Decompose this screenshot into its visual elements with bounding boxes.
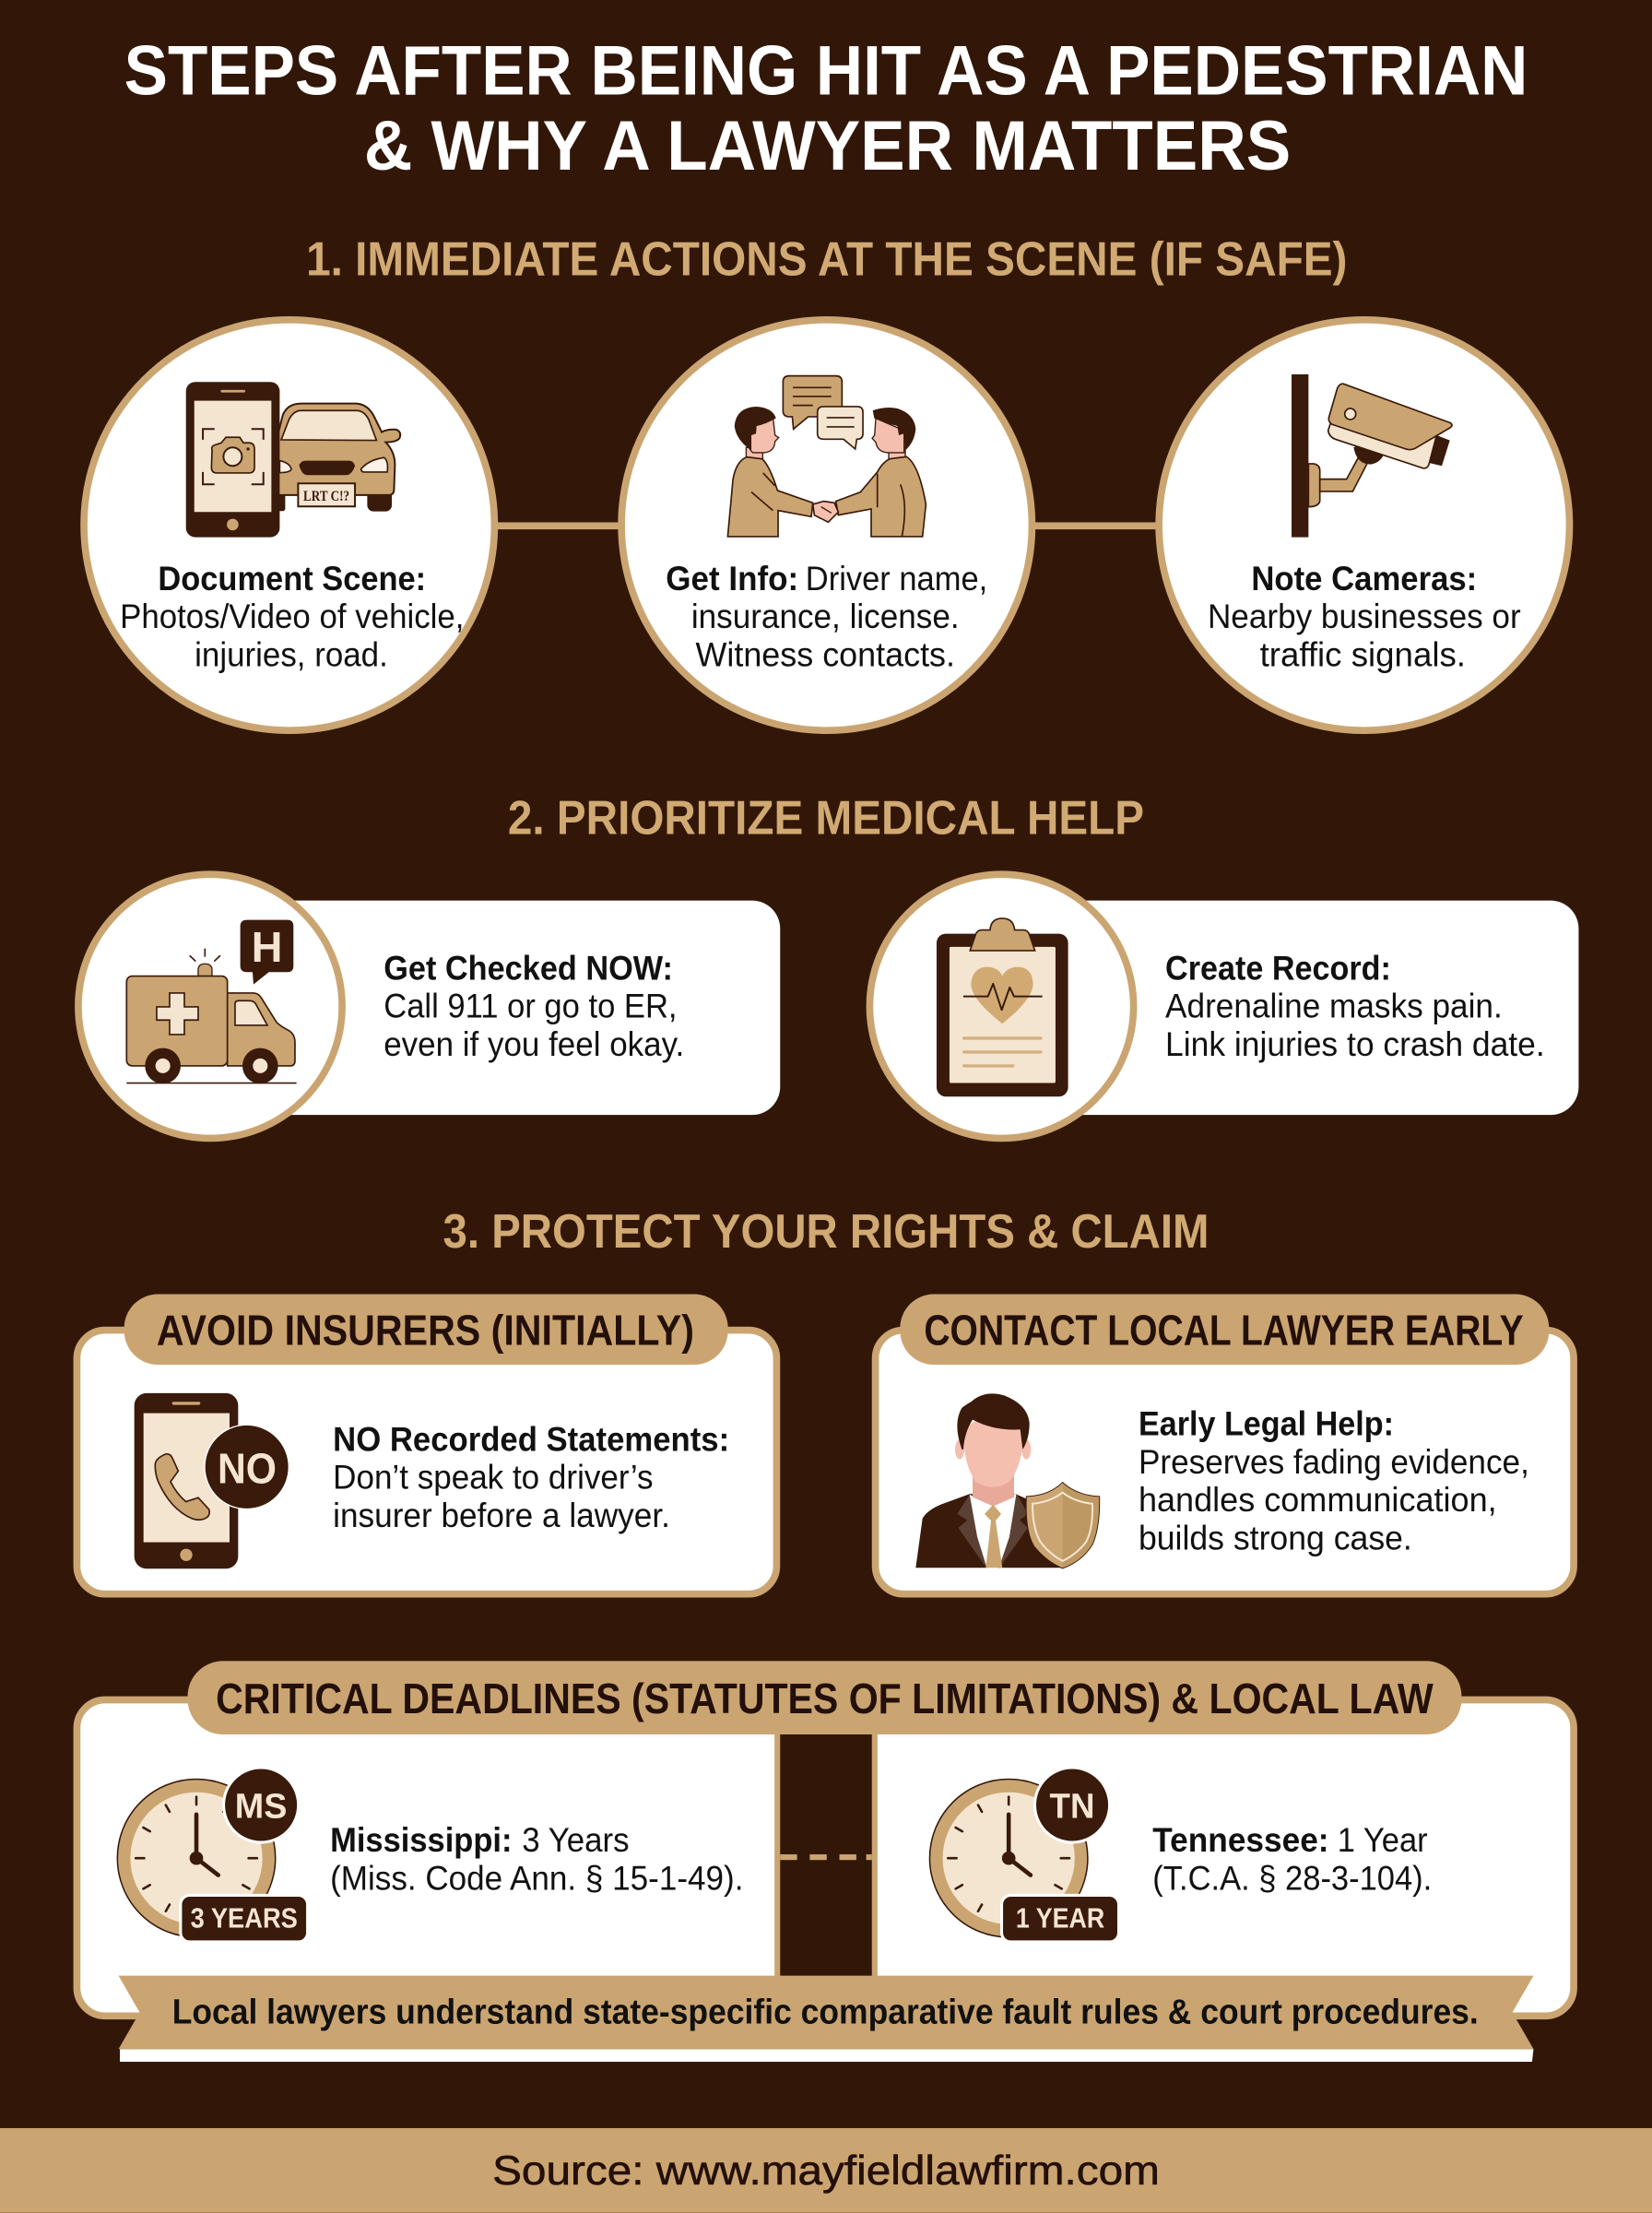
text: get info: Witness contacts. [695,635,955,674]
panel: contact local lawyer [876,1295,1574,1594]
text: create record: Link injuries to crash date. [1165,1024,1545,1063]
text: no recorded statements: Don’t speak to driver’s [333,1458,654,1497]
text: document scene: Document Scene: [158,559,426,598]
text: no recorded statements: insurer before a lawyer. [333,1496,670,1534]
text: get info: Driver name, [806,559,987,598]
text: get info [666,559,987,674]
panel: get checked now [78,874,780,1138]
text: note cameras: Note Cameras: [1251,559,1477,598]
panel: get info [621,320,1032,730]
text: note cameras [1208,559,1521,674]
text: create record: Create Record: [1165,948,1391,987]
icon: Tennessee clock: TN [1050,1786,1095,1826]
icon: Tennessee clock: 1 YEAR [1016,1903,1104,1935]
text: document scene: injuries, road. [195,635,388,674]
text: get checked now [384,948,684,1063]
connectors between step circles [487,522,1165,529]
text: early legal help: Early Legal Help: [1139,1404,1394,1443]
icon: Mississippi clock: 3 YEARS [191,1903,298,1935]
text: Mississippi: 3 Years [522,1820,630,1859]
text: document scene: Photos/Video of vehicle, [120,597,464,635]
panel: document scene [84,320,494,730]
divider between states [774,1734,878,1977]
text: get checked now: even if you feel okay. [384,1024,684,1063]
text: Tennessee: (T.C.A. § 28-3-104). [1152,1858,1432,1897]
footer: source: Source: www.mayfieldlawfirm.com [492,2148,1160,2194]
icon: phone with NO badge [135,1393,289,1568]
text: no recorded statements [333,1419,729,1534]
icon: phone camera and car [186,382,400,538]
text: note cameras: Nearby businesses or [1208,597,1521,635]
pill heading: avoid insurers [124,1295,728,1365]
text: document scene [120,559,464,674]
heading: section 1: 1. IMMEDIATE ACTIONS AT THE SCENE (IF SAFE) [306,233,1347,287]
text: Mississippi: Mississippi: [330,1820,513,1859]
icon: ambulance with hospital bubble [126,920,297,1083]
title: & WHY A LAWYER MATTERS [364,107,1291,185]
pill heading: critical deadlines [188,1661,1461,1734]
text: early legal help: handles communication, [1139,1480,1497,1519]
text: get checked now: Call 911 or go to ER, [384,987,678,1025]
text: create record: Adrenaline masks pain. [1165,987,1503,1025]
text: Mississippi [330,1820,743,1897]
panel: create record [869,874,1578,1138]
icon: handshake with speech bubbles [727,376,926,537]
panel: avoid insurers [77,1295,776,1594]
icon: lawyer with shield [915,1393,1100,1568]
text: Tennessee [1152,1820,1432,1897]
banner: local lawyers [119,1976,1533,2062]
banner: local lawyers: Local lawyers understand state-specific comparative fault rules & court procedures. [172,1993,1479,2032]
icon: phone with NO badge: NO [218,1445,277,1493]
icon: ambulance with hospital bubble: H [252,923,282,971]
pill heading: critical deadlines: CRITICAL DEADLINES (STATUTES OF LIMITATIONS) & LOCAL LAW [216,1675,1434,1722]
icon: Tennessee clock [929,1768,1119,1942]
title: STEPS AFTER BEING HIT AS A PEDESTRIAN [124,32,1528,111]
text: Tennessee: Tennessee: [1152,1820,1329,1859]
text: early legal help: builds strong case. [1139,1519,1412,1557]
text: early legal help [1139,1404,1529,1557]
heading: section 2: 2. PRIORITIZE MEDICAL HELP [508,792,1144,846]
panel: note cameras [1159,320,1569,730]
icon: Mississippi clock [117,1768,308,1942]
text: create record [1165,948,1545,1063]
icon: security camera [1292,374,1452,538]
text: get checked now: Get Checked NOW: [384,948,673,987]
panel: critical deadlines [77,1661,1574,2016]
text: get info: Get Info: [666,559,798,598]
heading: section 3: 3. PROTECT YOUR RIGHTS & CLAIM [443,1205,1209,1259]
text: note cameras: traffic signals. [1260,635,1466,674]
icon: Mississippi clock: MS [235,1786,287,1826]
text: early legal help: Preserves fading evidence, [1139,1442,1529,1481]
icon: phone camera and car: LRT C!? [303,489,349,504]
text: Mississippi: (Miss. Code Ann. § 15-1-49). [330,1858,743,1897]
title [124,32,1528,185]
pill heading: contact local lawyer: CONTACT LOCAL LAWYER EARLY [924,1307,1524,1355]
text: get info: insurance, license. [691,597,960,635]
pill heading: contact local lawyer [900,1295,1549,1365]
footer: source [0,2128,1652,2213]
text: Tennessee: 1 Year [1338,1820,1428,1859]
pill heading: avoid insurers: AVOID INSURERS (INITIALLY) [157,1307,694,1355]
text: no recorded statements: NO Recorded Statements: [333,1419,729,1458]
icon: clipboard with heart [937,918,1068,1096]
